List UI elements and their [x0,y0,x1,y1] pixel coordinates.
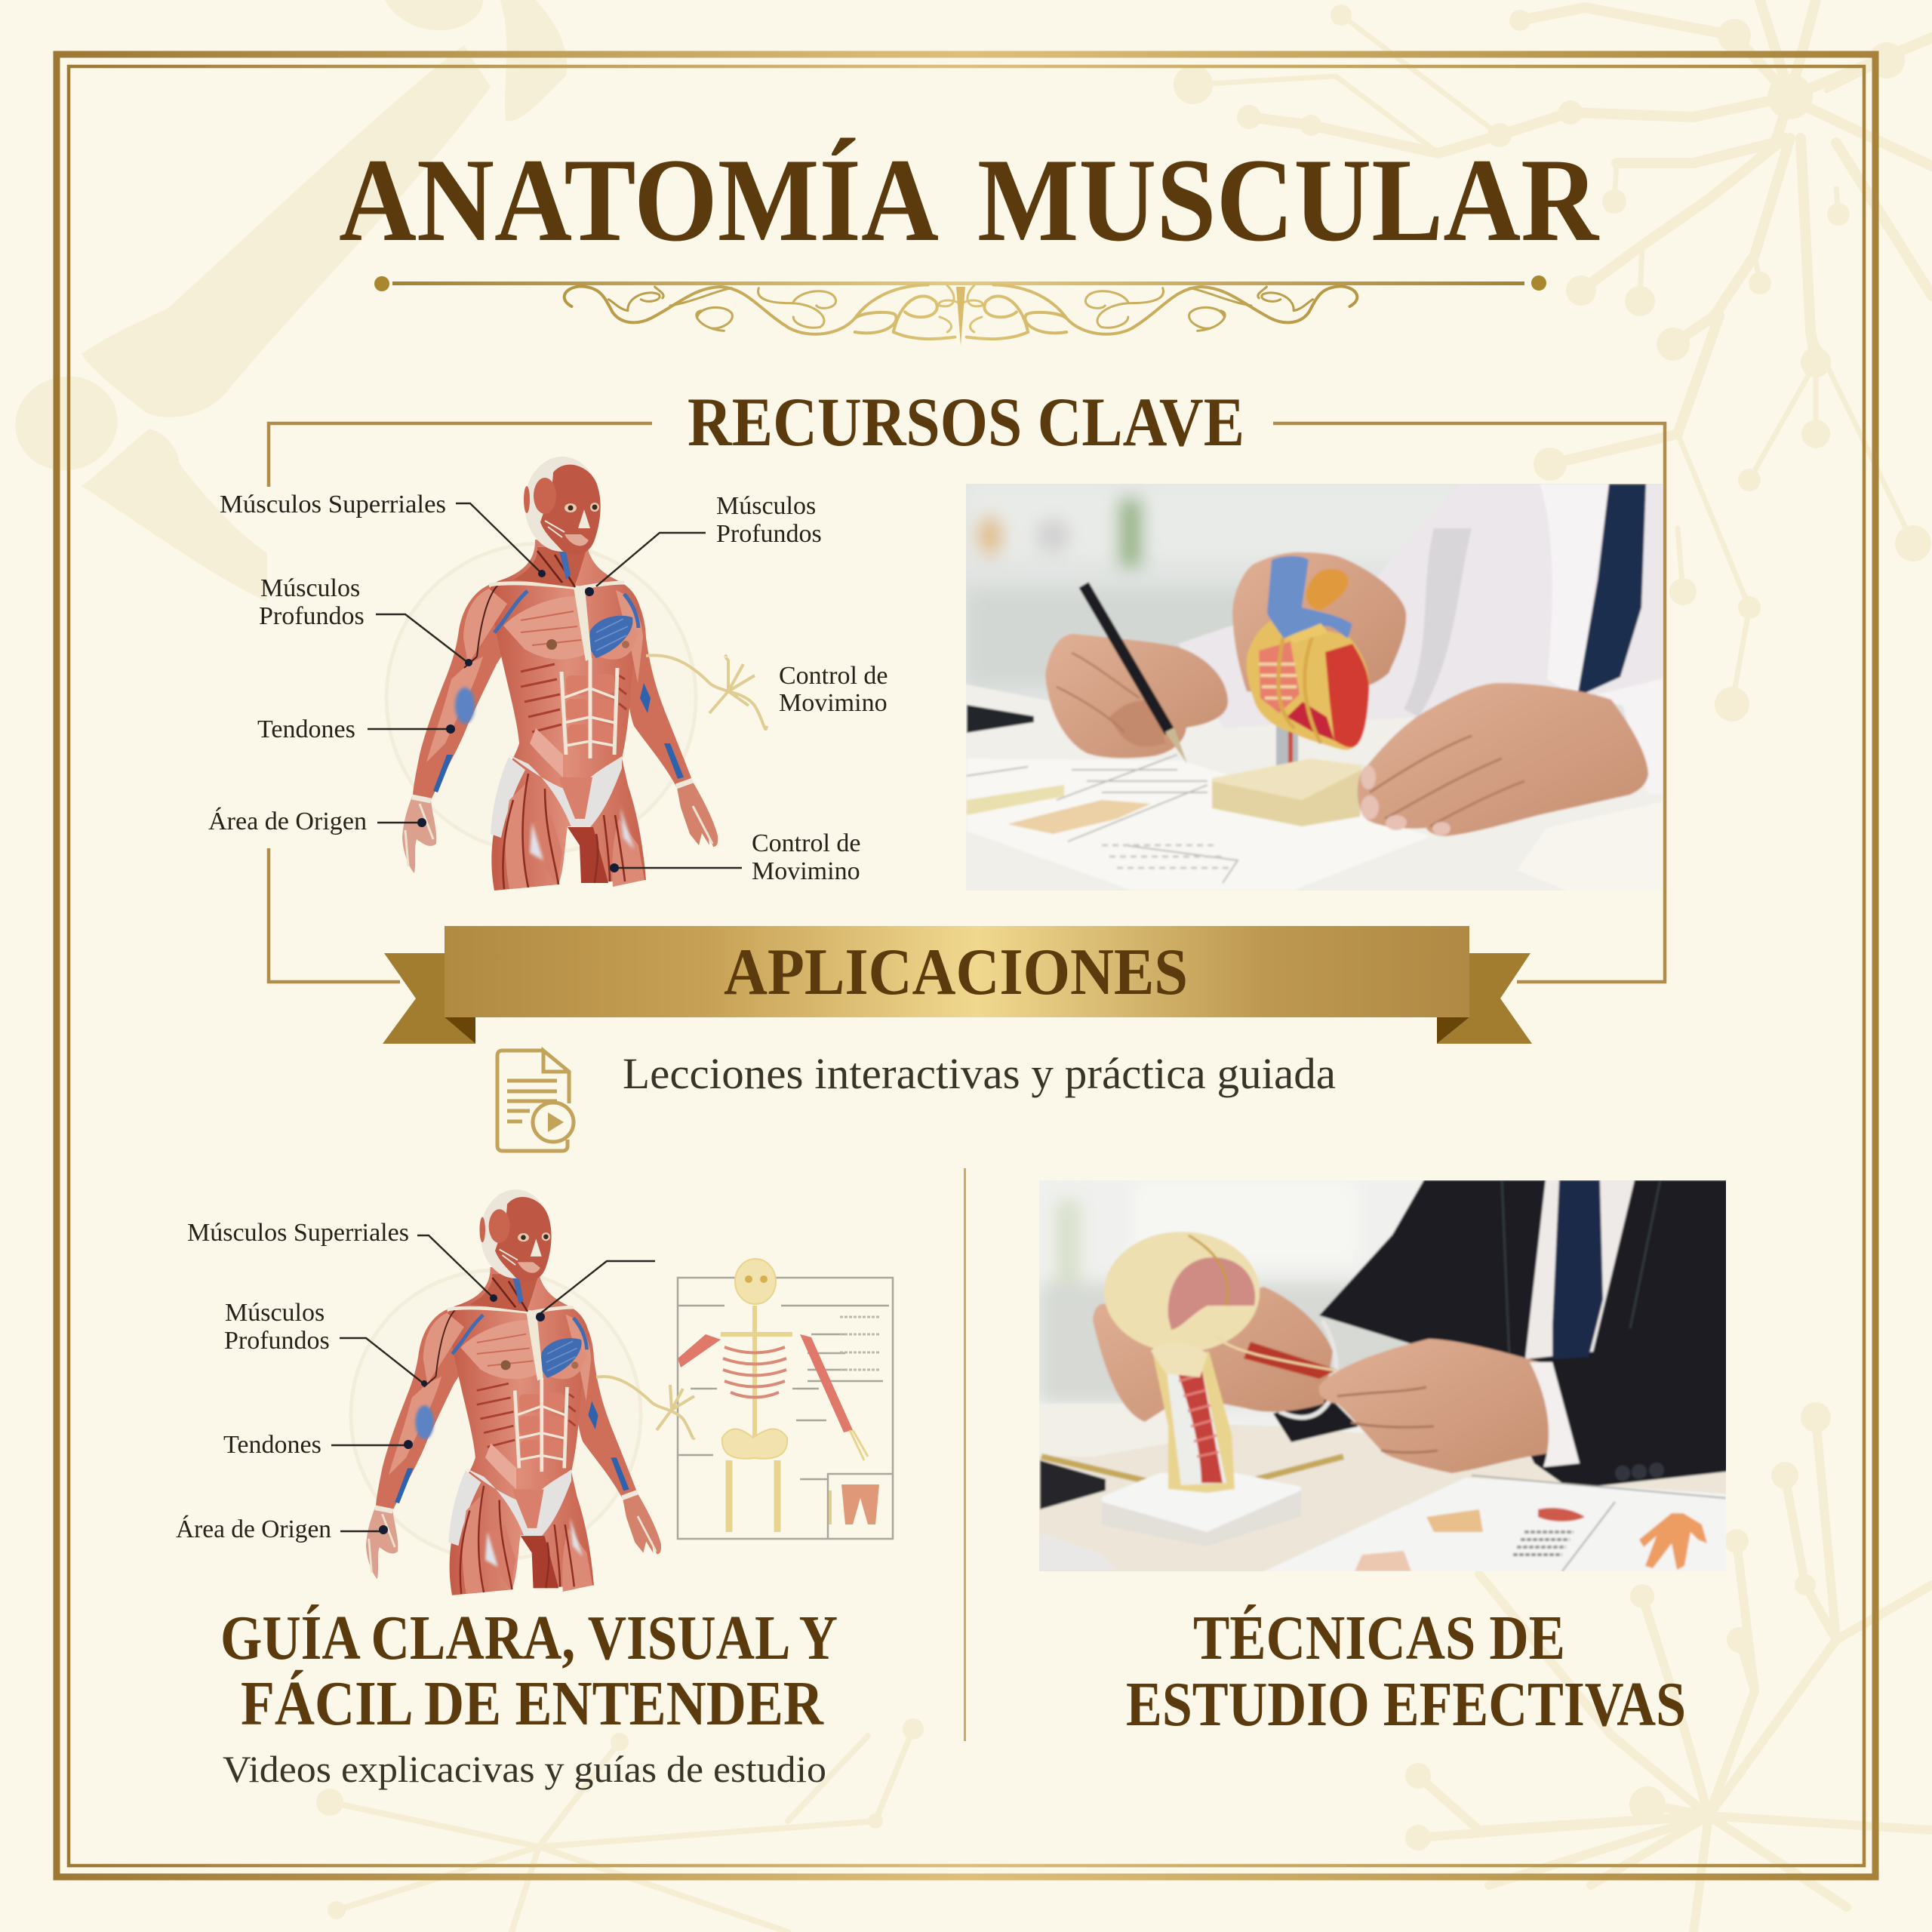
heading: guía clara: GUÍA CLARA, VISUAL Y [220,1603,838,1673]
right sleeve [1597,679,1663,794]
muscle strands [1244,1342,1337,1379]
label: músculos profundos: Músculos [225,1299,325,1327]
label: área de origen: Área de Origen [208,808,367,835]
panel: lower muscle diagram [176,1189,893,1595]
label: músculos profundos right: Profundos [716,520,822,548]
heading: técnicas: ESTUDIO EFECTIVAS [1126,1669,1686,1740]
study sheet [1264,1478,1734,1579]
tie [1552,1180,1603,1359]
model base [1102,1472,1301,1532]
ribbon: aplicaciones [383,926,1532,1044]
label: músculos superriales: Músculos Superriales [187,1219,409,1247]
label: músculos profundos right: Músculos [716,492,816,520]
shirt cuff [1530,1362,1580,1467]
label: músculos superriales: Músculos Superriales [220,491,446,518]
title flourish divider [374,275,1546,346]
gold ruler and tablet [1041,1457,1343,1483]
tie [1577,484,1646,697]
paper [967,758,1431,891]
lower muscle figure [366,1189,661,1595]
shirt [1525,1180,1635,1359]
desk [958,683,1670,898]
heading: guía clara: FÁCIL DE ENTENDER [241,1669,824,1739]
suit [1273,1180,1734,1489]
label: músculos profundos left: Profundos [259,602,365,630]
holding hand [1093,1287,1333,1422]
subheading: lecciones interactivas: Lecciones interactivas y práctica guiada [623,1049,1336,1098]
writing hand [1045,634,1228,758]
lower nerve branch [596,1377,694,1438]
neck model [1152,1352,1235,1493]
ribbon label: APLICACIONES [724,936,1188,1009]
skull model [1104,1232,1260,1352]
label: control de movimino upper: Movimino [779,689,888,717]
nerve branch [646,655,767,729]
resting hand [1358,683,1648,836]
label: tendones: Tendones [223,1431,321,1459]
faint circle behind figure [386,543,696,853]
lower leader lines [331,1235,655,1534]
notebook [1517,800,1670,898]
suit buttons [1615,1463,1664,1481]
desk [1039,1425,1726,1571]
label: control de movimino lower: Movimino [752,857,860,885]
pen [1084,585,1170,732]
tablet [967,705,1034,733]
skeleton chart [678,1259,893,1539]
title: MUSCULAR [977,134,1600,266]
label: control de movimino lower: Control de [752,829,860,857]
icon: document with play [497,1051,574,1151]
label: tendones: Tendones [257,715,355,743]
label: control de movimino upper: Control de [779,662,888,690]
section heading: recursos clave: RECURSOS CLAVE [688,383,1244,460]
faint circle behind lower figure [351,1270,641,1560]
heading: técnicas: TÉCNICAS DE [1193,1603,1565,1673]
left cuff [1279,1321,1337,1417]
holding hand [1232,552,1406,692]
label: músculos profundos: Profundos [224,1327,330,1355]
panel: labelled muscle diagram [208,457,888,891]
pinching hand [1318,1339,1556,1473]
section bracket line [269,423,1665,982]
photo: doctor with heart model [958,476,1670,898]
title: ANATOMÍA [339,134,939,266]
label: músculos profundos left: Músculos [260,574,360,602]
shirt [1178,484,1670,728]
leader lines [368,503,742,872]
heart model [1212,556,1369,826]
photo: doctor with head and neck model [1032,1173,1734,1579]
column divider [964,1168,966,1741]
label: área de origen: Área de Origen [176,1515,331,1543]
subtext: videos: Videos explicacivas y guías de estudio [223,1748,826,1790]
muscle figure [402,457,718,891]
